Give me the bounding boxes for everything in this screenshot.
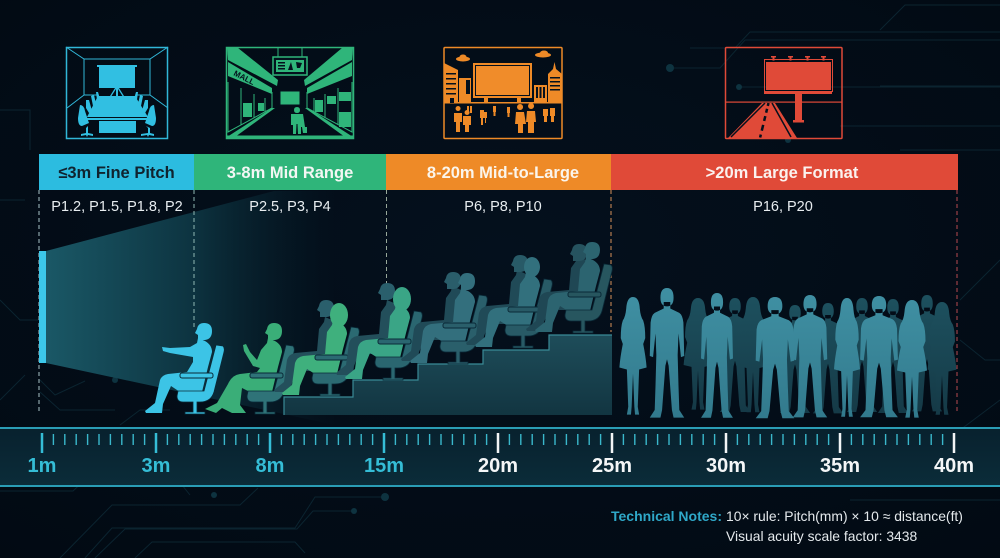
icon: highway billboard xyxy=(725,48,842,138)
crowd icons xyxy=(454,103,555,133)
technical notes: 10× rule: Pitch(mm) × 10 ≈ distance(ft) xyxy=(726,508,963,524)
main billboard xyxy=(473,63,532,98)
scale labels: 1m xyxy=(28,455,56,477)
distance ruler xyxy=(0,427,1000,487)
icon: conference room xyxy=(66,47,168,138)
stepped seating platform xyxy=(284,335,612,415)
front row silhouettes xyxy=(619,288,927,418)
scale labels xyxy=(28,455,974,477)
back row silhouettes xyxy=(684,295,956,415)
category bar xyxy=(39,154,958,190)
distance zone dividers xyxy=(39,190,957,414)
pixel pitch labels: P1.2, P1.5, P1.8, P2 xyxy=(51,199,183,215)
pixel pitch labels: P6, P8, P10 xyxy=(464,199,542,215)
segment: mid range xyxy=(194,154,386,190)
scale labels: 25m xyxy=(592,455,632,477)
segment: mid range: 3-8m Mid Range xyxy=(227,164,353,182)
standing crowd xyxy=(619,288,956,418)
shopper xyxy=(291,107,307,134)
road xyxy=(728,103,797,138)
sign: MALL: MALL xyxy=(232,69,256,87)
left buildings xyxy=(444,63,458,103)
major ticks xyxy=(42,433,954,453)
hanging sign xyxy=(273,47,307,75)
scale labels: 30m xyxy=(706,455,746,477)
viewer row 5 xyxy=(401,272,487,364)
light cone from screen xyxy=(46,191,335,425)
minor ticks xyxy=(53,434,950,445)
segment: large format: >20m Large Format xyxy=(706,164,859,182)
technical notes xyxy=(611,508,963,544)
viewer row 6 xyxy=(466,255,552,348)
scale labels: 15m xyxy=(364,455,404,477)
clouds xyxy=(456,56,470,62)
viewer row 2 xyxy=(205,323,294,414)
scale labels: 3m xyxy=(142,455,170,477)
segment: fine pitch xyxy=(39,154,194,190)
technical notes: Visual acuity scale factor: 3438 xyxy=(726,528,918,544)
segment: large format xyxy=(611,154,958,190)
pixel pitch labels xyxy=(51,199,813,215)
viewer row 3 xyxy=(274,300,359,396)
viewer row 7 xyxy=(526,242,612,333)
technical notes: Technical Notes: xyxy=(611,508,722,524)
segment: fine pitch: ≤3m Fine Pitch xyxy=(58,164,175,182)
viewer row 1 xyxy=(145,323,224,414)
scale labels: 35m xyxy=(820,455,860,477)
viewer row 4 xyxy=(336,283,422,380)
scale labels: 8m xyxy=(256,455,284,477)
segment: mid-to-large xyxy=(386,154,611,190)
LED screen xyxy=(39,251,46,363)
icon: urban plaza screen xyxy=(444,48,562,138)
pixel pitch labels: P16, P20 xyxy=(753,199,813,215)
segment: mid-to-large: 8-20m Mid-to-Large xyxy=(427,164,579,182)
left chairs xyxy=(78,105,89,126)
scale labels: 40m xyxy=(934,455,974,477)
scale labels: 20m xyxy=(478,455,518,477)
right buildings xyxy=(534,85,547,103)
icon: shopping mall corridor xyxy=(226,47,354,138)
right chairs xyxy=(145,105,156,126)
seated audience xyxy=(145,242,612,414)
pixel pitch labels: P2.5, P3, P4 xyxy=(249,199,331,215)
